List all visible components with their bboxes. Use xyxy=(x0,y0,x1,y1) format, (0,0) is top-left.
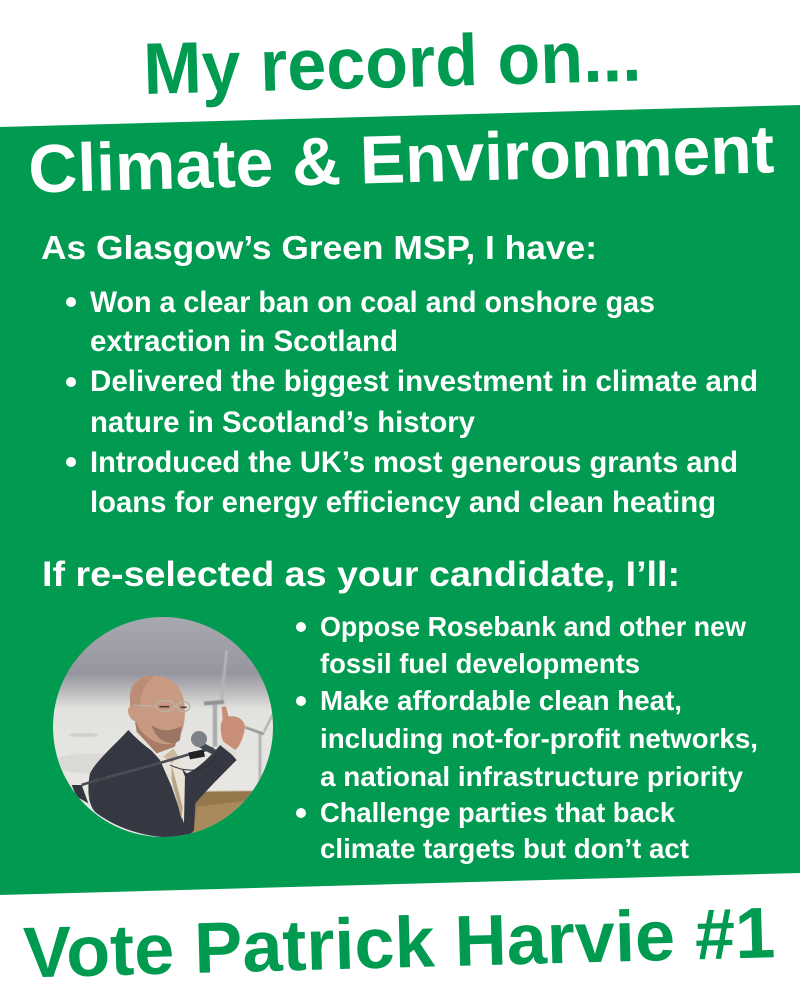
section: pledges xyxy=(42,555,758,864)
jacket xyxy=(88,730,237,838)
footer: Vote Patrick Harvie #1: Vote Patrick Harvie #1 xyxy=(22,893,776,993)
bullet list: pledges: Challenge parties that back xyxy=(320,797,675,828)
bullet list: achievements: loans for energy efficiency and clean heating xyxy=(90,486,716,519)
photo: Patrick Harvie speaking at a wind farm xyxy=(53,617,273,840)
neck and head xyxy=(135,722,178,753)
subheading: As Glasgow's Green MSP: As Glasgow’s Green MSP, I have: xyxy=(41,229,597,266)
bullet list: pledges xyxy=(296,611,758,864)
panel: green band xyxy=(0,105,800,895)
bullet list: pledges: Make affordable clean heat, xyxy=(320,685,682,716)
heading: Climate & Environment: Climate & Environment xyxy=(27,111,775,207)
bullet list: pledges: fossil fuel developments xyxy=(320,648,640,679)
section: record so far xyxy=(41,229,758,519)
glasses xyxy=(133,701,190,712)
shirt xyxy=(136,733,185,823)
title: My record on...: My record on... xyxy=(142,16,642,110)
bullet list: pledges: climate targets but don’t act xyxy=(320,833,689,864)
bullet list: achievements: Introduced the UK’s most generous grants and xyxy=(90,446,738,479)
raised hand xyxy=(221,707,245,750)
bullet list: pledges: Oppose Rosebank and other new xyxy=(320,611,746,642)
bullet list: achievements: Delivered the biggest investment in climate and xyxy=(90,365,758,398)
bullet list: pledges: a national infrastructure priority xyxy=(320,761,743,792)
subheading: If re-selected: If re-selected as your candidate, I’ll: xyxy=(42,555,680,594)
bullet list: achievements xyxy=(66,286,758,519)
bullet list: achievements: extraction in Scotland xyxy=(90,325,398,358)
bullet list: achievements: Won a clear ban on coal and onshore gas xyxy=(90,286,655,319)
bullet list: achievements: nature in Scotland’s history xyxy=(90,406,475,439)
bullet list: pledges: including not-for-profit networks, xyxy=(320,723,758,754)
microphone stand and microphone xyxy=(72,785,88,803)
